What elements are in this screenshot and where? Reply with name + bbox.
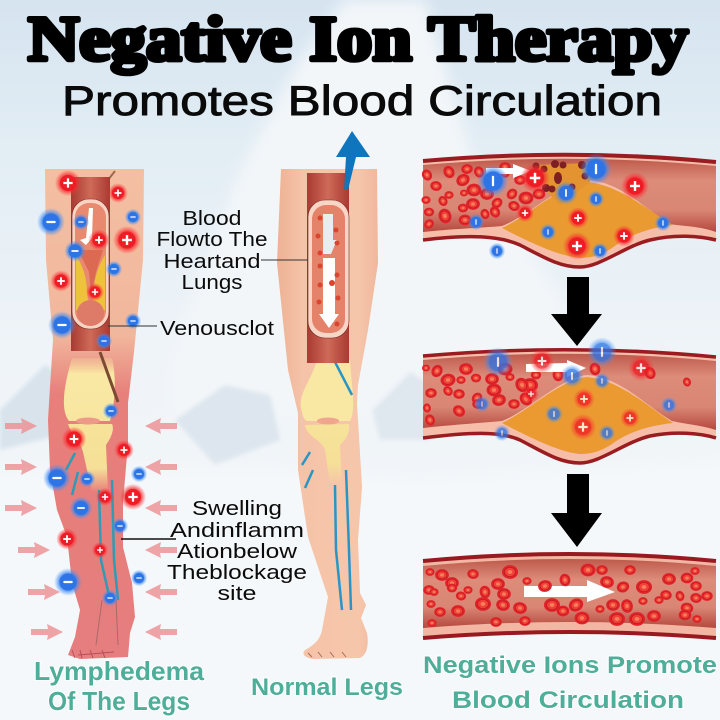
- label: blood flow to the heart and lungs: Flowto The: [156, 229, 268, 251]
- red cells: [423, 564, 713, 627]
- red cells: [422, 362, 692, 427]
- leg outline: [277, 169, 378, 659]
- arrow: flow to the heart: [336, 131, 370, 190]
- ions on left leg: [37, 170, 147, 606]
- label: swelling and inflammation: Ationbelow: [177, 541, 298, 563]
- vessel cutaway: clot: [71, 177, 110, 351]
- down arrow 1: [551, 277, 602, 346]
- label: swelling and inflammation: site: [218, 583, 256, 605]
- caption: negative ions promote blood circulation: Negative Ions Promote: [423, 652, 717, 679]
- flow arrow: [526, 360, 586, 377]
- right vessel 2: partly cleared: [422, 337, 716, 463]
- swelling pressure arrows: [5, 418, 177, 640]
- toes: [308, 652, 346, 657]
- left leg: lymphedema: [45, 169, 144, 659]
- caption: lymphedema of the legs: [34, 656, 205, 716]
- plaque: [502, 182, 673, 258]
- caption: negative ions promote blood circulation: Blood Circulation: [452, 687, 684, 714]
- label: swelling and inflammation: Theblockage: [167, 562, 307, 584]
- right-hand normal leg: [277, 131, 378, 659]
- ions: [474, 337, 677, 441]
- toes: [72, 650, 114, 658]
- veins: [66, 453, 118, 600]
- label: swelling and inflammation: [121, 498, 307, 605]
- caption: lymphedema of the legs: Of The Legs: [48, 686, 190, 716]
- red cells: [420, 162, 545, 231]
- label: swelling and inflammation: Swelling: [192, 498, 282, 520]
- caption: negative ions promote blood circulation: [423, 652, 717, 714]
- right vessel 1: blocked: [420, 153, 716, 267]
- right vessel 3: healthy flow: [423, 554, 716, 638]
- knee bones: [64, 358, 115, 421]
- plaque: [502, 377, 673, 454]
- label: blood flow to the heart and lungs: [156, 208, 308, 294]
- down arrow 2: [551, 474, 602, 547]
- label: swelling and inflammation: Andinflamm: [170, 520, 304, 542]
- flow arrow: [524, 580, 615, 602]
- ions: [468, 153, 671, 260]
- label: blood flow to the heart and lungs: Blood: [182, 208, 242, 230]
- vessel cutaway: clear flow: [307, 173, 349, 363]
- caption: normal legs: Normal Legs: [251, 674, 403, 701]
- label: blood flow to the heart and lungs: Lungs: [182, 272, 242, 294]
- caption: lymphedema of the legs: Lymphedema: [34, 656, 205, 686]
- label: blood flow to the heart and lungs: Heartand: [164, 251, 260, 273]
- veins: [302, 362, 352, 610]
- subtitle: Promotes Blood Circulation: [62, 77, 662, 124]
- flow arrow: [486, 164, 531, 178]
- leg outline: [45, 169, 144, 659]
- title: Negative Ion Therapy: [28, 4, 688, 74]
- label: venous clot: Venousclot: [160, 318, 275, 340]
- knee bones: [301, 360, 353, 421]
